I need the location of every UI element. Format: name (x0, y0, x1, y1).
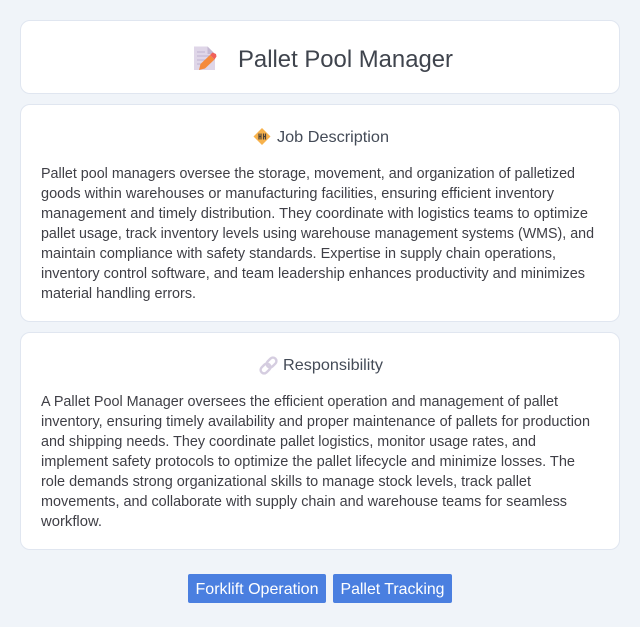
tag: pallet tracking: Pallet Tracking (340, 581, 444, 598)
tag: pallet tracking (333, 574, 452, 603)
panel: job description card (20, 104, 620, 322)
panel: responsibility card (20, 332, 620, 550)
icon: chain link (259, 356, 278, 375)
text block: responsibility: workflow. (40, 514, 102, 530)
text block: job description: Pallet pool managers oversee the storage, movement, and organization of palletized (41, 166, 575, 182)
text block: job description (41, 166, 594, 302)
text block: responsibility: A Pallet Pool Manager oversees the efficient operation and management of pallet (41, 394, 558, 410)
icon: document with pencil (194, 46, 216, 70)
tag: forklift operation (188, 574, 326, 603)
icon: road sign (254, 128, 270, 145)
text block: responsibility: and shipping needs. They coordinate pallet logistics, monitor usage rates, and (41, 434, 536, 450)
text block: responsibility: movements, and collaborate with supply chain and warehouse teams for seamless (41, 494, 567, 510)
text block: job description: inventory control software, and team leadership enhances productivity and minimizes (41, 266, 585, 282)
heading: responsibility: Responsibility (283, 357, 383, 374)
tag: forklift operation: Forklift Operation (196, 581, 318, 598)
text block: responsibility: role demands strong organizational skills to manage stock levels, track pallet (41, 474, 531, 490)
title: Pallet Pool Manager (238, 46, 453, 73)
text block: job description: goods within warehouses or manufacturing facilities, ensuring efficient inventory (41, 186, 555, 202)
text block: responsibility: implement safety protocols to optimize the pallet lifecycle and minimize losses. The (41, 454, 575, 470)
panel: title card (20, 20, 620, 94)
text block: responsibility: inventory, ensuring timely availability and proper maintenance of pallets for production (41, 414, 590, 430)
text block: job description: management and timely distribution. They coordinate with logistics teams to optimize (41, 206, 588, 222)
text block: responsibility (40, 394, 590, 530)
heading: job description: Job Description (277, 129, 389, 146)
text block: job description: maintain compliance with safety standards. Expertise in supply chain operations, (41, 246, 556, 262)
text block: job description: pallet usage, track inventory levels using warehouse management systems (WMS), and (41, 226, 594, 242)
text block: job description: material handling errors. (41, 286, 196, 302)
